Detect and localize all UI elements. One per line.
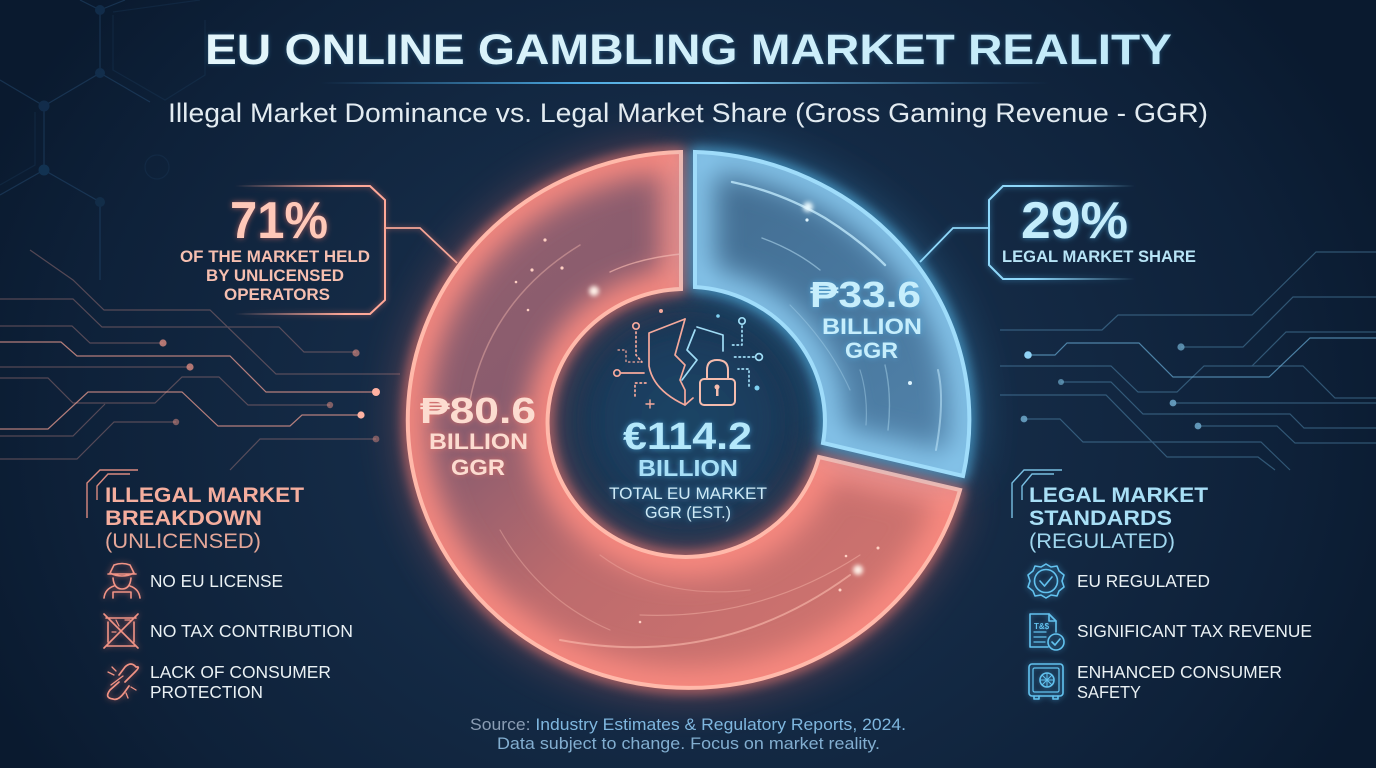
- circuit lines left: [0, 250, 400, 470]
- panel heading: (UNLICENSED): [105, 530, 261, 553]
- icon: broken chain: [108, 664, 138, 699]
- panel heading: [1012, 470, 1208, 553]
- item: enhanced consumer safety: ENHANCED CONSUMER: [1077, 662, 1282, 682]
- centre total value: [609, 416, 767, 522]
- item: enhanced consumer safety: [1077, 662, 1282, 702]
- icon: tax document with check: T&$: [1034, 622, 1050, 631]
- title divider: [320, 82, 1050, 84]
- label: legal market value: BILLION: [822, 314, 922, 339]
- circuit lines right: [1000, 252, 1376, 470]
- label: legal market value: [810, 274, 922, 363]
- item: no EU license: NO EU LICENSE: [150, 571, 283, 591]
- label: legal market value: GGR: [845, 338, 898, 363]
- panel heading: STANDARDS: [1029, 507, 1172, 530]
- callout: 71 percent: OPERATORS: [224, 286, 330, 304]
- centre total value: €114.2: [623, 416, 752, 458]
- centre total value: BILLION: [638, 455, 738, 481]
- subtitle: Illegal Market Dominance vs. Legal Market Share (Gross Gaming Revenue - GGR): [168, 98, 1208, 128]
- item: enhanced consumer safety: SAFETY: [1077, 682, 1141, 702]
- segment: legal market 29%: [695, 152, 969, 476]
- panel: legal market standards: [1012, 470, 1312, 702]
- icon: crossed out tax box: [104, 614, 138, 648]
- panel: illegal market breakdown: [87, 470, 353, 702]
- segment: illegal market 71%: [408, 152, 960, 688]
- panel heading: BREAKDOWN: [105, 507, 262, 530]
- source note: [470, 716, 906, 753]
- label: illegal market value: GGR: [451, 455, 505, 480]
- title: EU ONLINE GAMBLING MARKET REALITY: [205, 26, 1172, 74]
- item: EU regulated: EU REGULATED: [1077, 571, 1210, 591]
- callout: 71 percent: 71%: [230, 192, 328, 250]
- item: no tax contribution: NO TAX CONTRIBUTION: [150, 621, 353, 641]
- panel heading: ILLEGAL MARKET: [105, 484, 304, 507]
- centre total value: TOTAL EU MARKET: [609, 484, 767, 503]
- callout: 71 percent: BY UNLICENSED: [206, 267, 344, 285]
- label: legal market value: ₱33.6: [810, 274, 921, 315]
- item: lack of consumer protection: PROTECTION: [150, 682, 263, 702]
- item: lack of consumer protection: LACK OF CONSUMER: [150, 662, 331, 682]
- callout: 29 percent: [920, 186, 1196, 279]
- item: significant tax revenue: SIGNIFICANT TAX REVENUE: [1077, 621, 1312, 641]
- icon: tax document with check: [1030, 614, 1064, 650]
- callout: 29 percent: LEGAL MARKET SHARE: [1002, 248, 1196, 266]
- source note: Data subject to change. Focus on market reality.: [497, 735, 880, 753]
- callout: 71 percent: OF THE MARKET HELD: [180, 248, 370, 266]
- donut chart: [408, 152, 969, 688]
- source note: Source: Industry Estimates & Regulatory Reports, 2024.: [470, 716, 906, 734]
- hexagon network decoration: [0, 0, 205, 280]
- panel heading: (REGULATED): [1029, 530, 1175, 553]
- label: illegal market value: [420, 390, 536, 480]
- item: lack of consumer protection: [150, 662, 331, 702]
- label: illegal market value: ₱80.6: [420, 390, 536, 431]
- centre total value: GGR (EST.): [645, 503, 731, 522]
- panel heading: LEGAL MARKET: [1029, 484, 1208, 507]
- label: illegal market value: BILLION: [429, 429, 528, 454]
- icon: approval badge: [1028, 564, 1064, 598]
- icon: safe: [1029, 664, 1063, 699]
- icon: broken shield and padlock: [614, 309, 762, 408]
- panel heading: [87, 470, 304, 553]
- centre hole shade: [588, 323, 788, 519]
- icon: hooded figure: [104, 564, 140, 598]
- callout: 71 percent: [180, 186, 457, 314]
- callout: 29 percent: 29%: [1021, 192, 1128, 250]
